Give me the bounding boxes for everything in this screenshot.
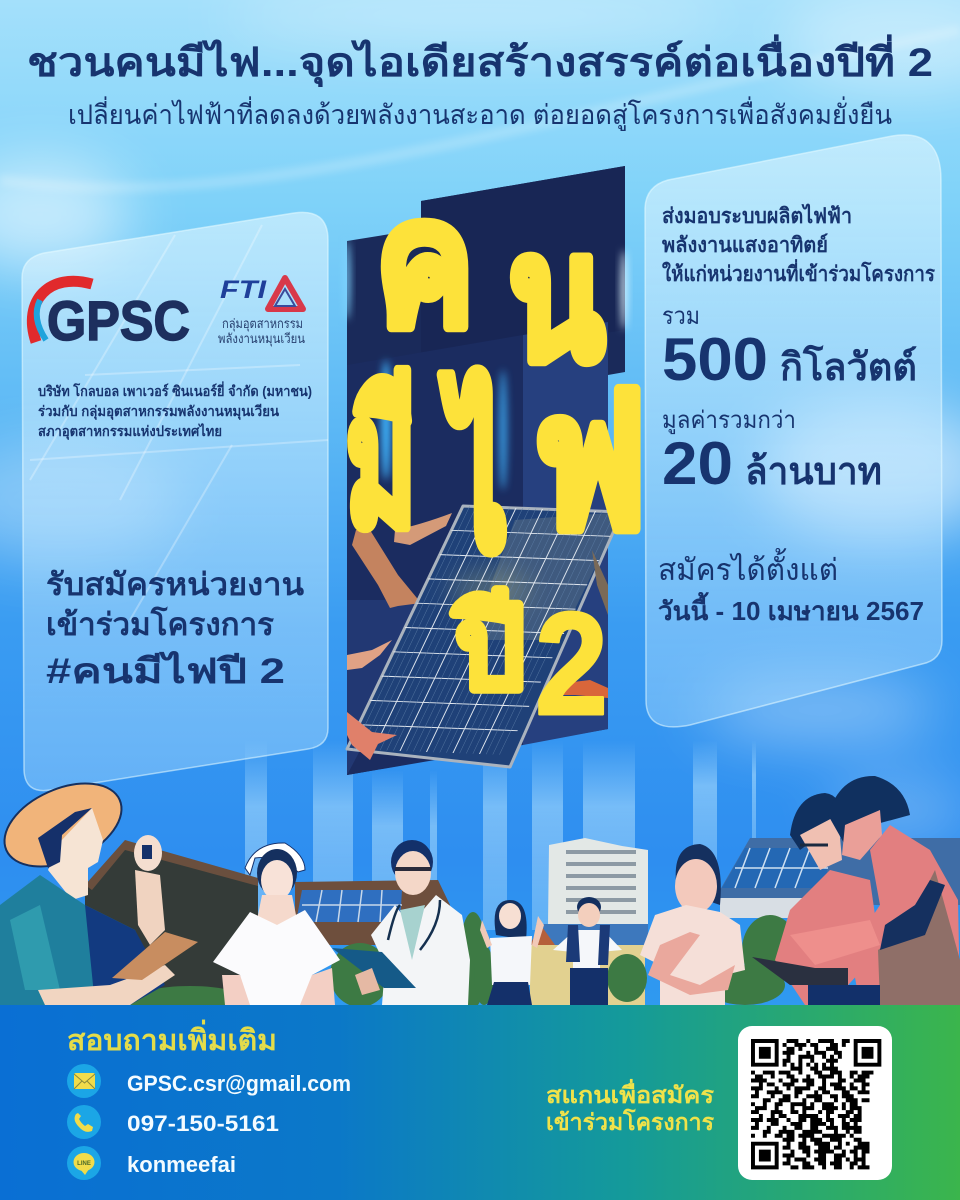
logo: GPSC: GPSC [47,289,190,352]
hospital tower [548,838,648,925]
dark central panels [344,166,627,775]
contact: email [67,1064,351,1098]
headline: คนมีไฟ ปี 2: 2 [535,582,608,745]
text: application dates [658,548,924,626]
text: organisers [38,381,312,440]
title: ชวนคนมีไฟ...จุดไอเดียสร้างสรรค์ต่อเนื่องปีที่ 2 [27,34,933,88]
panel: left glass card [22,212,328,791]
stat: 500 kilowatts [662,303,917,393]
text: right card description: พลังงานแสงอาทิตย์ [662,233,828,257]
contact: phone [67,1105,279,1139]
stat: 20 million baht: 20 [662,430,733,497]
logo: FTI: กลุ่มอุตสาหกรรม [222,316,303,332]
hands [394,513,452,545]
back student [790,793,836,850]
panel frame [347,506,622,767]
icon: envelope [74,1073,95,1089]
panel: right glass card [645,135,942,727]
contact: email: GPSC.csr@gmail.com [127,1071,351,1096]
greenery [130,912,786,1005]
headline: คนมีไฟ ปี 2: น [509,201,604,396]
person: nurse [213,843,340,1005]
person: teacher [640,844,745,1005]
headline: คนมีไฟ ปี 2: ปี [451,585,525,713]
clipboard [112,932,198,980]
front student [828,776,910,845]
text: organisers: สภาอุตสาหกรรมแห่งประเทศไทย [38,422,222,440]
logo: FTI [218,276,305,347]
contact: LINE: konmeefai [127,1152,236,1177]
solar panel held by hands [347,506,622,767]
text: organisers: ร่วมกับ กลุ่มอุตสาหกรรมพลังงานหมุนเวียน [38,403,279,420]
text: call for applications: #คนมีไฟปี 2 [46,650,285,691]
subtitle: เปลี่ยนค่าไฟฟ้าที่ลดลงด้วยพลังงานสะอาด ต่อยอดสู่โครงการเพื่อสังคมยั่งยืน [68,96,892,131]
logo: FTI: พลังงานหมุนเวียน [218,331,305,347]
text: organisers: บริษัท โกลบอล เพาเวอร์ ซินเนอร์ยี่ จำกัด (มหาชน) [38,381,312,399]
stat: 20 million baht: มูลค่ารวมกว่า [662,407,796,435]
face [48,808,103,900]
heading: more information: สอบถามเพิ่มเติม [67,1019,277,1057]
text: scan to apply: สแกนเพื่อสมัคร [546,1078,715,1108]
scene: community buildings and greenery [85,838,960,1018]
solar roof building [295,880,450,945]
icon: phone [75,1113,93,1132]
faint solar panel lines [30,225,328,620]
QR code card [738,1026,892,1180]
stat: 20 million baht: ล้านบาท [745,451,882,493]
stat: 500 kilowatts: 500 [662,326,768,393]
contact: LINE [67,1146,236,1180]
yellow house [530,945,645,1005]
text: right card description [662,203,936,286]
text: call for applications [46,567,304,691]
text: scan to apply: เข้าร่วมโครงการ [546,1108,715,1135]
icon: LINE bubble [74,1153,94,1175]
contact: phone: 097-150-5161 [127,1111,279,1136]
hat [4,782,122,868]
footer band [0,1005,960,1200]
person: schoolboy [553,897,622,1005]
solar rooftop right [720,838,960,905]
stat: 500 kilowatts: รวม [662,303,700,330]
headline: คนมีไฟ ปี 2: ฟ [534,360,646,566]
light beams [245,740,756,930]
people: two students with tablet [752,776,960,1005]
headline: คนมีไฟ ปี 2 [346,167,646,745]
shirt [0,875,136,1005]
text: application dates: วันนี้ - 10 เมษายน 2567 [658,591,924,626]
headline: คนมีไฟ ปี 2: ไ [439,369,508,590]
text: call for applications: รับสมัครหน่วยงาน [46,567,304,602]
text: scan to apply [546,1078,715,1135]
tablet [752,957,848,985]
icon: LINE bubble: LINE [77,1161,91,1167]
person: farmer [0,767,198,1005]
stat: 20 million baht [662,407,882,497]
panel grid [347,506,622,755]
text: call for applications: เข้าร่วมโครงการ [46,606,274,642]
barn [85,842,258,1005]
text: right card description: ให้แก่หน่วยงานที่เข้าร่วมโครงการ [662,258,936,286]
stat: 500 kilowatts: กิโลวัตต์ [780,344,917,389]
text: right card description: ส่งมอบระบบผลิตไฟฟ้า [662,203,852,228]
headline: คนมีไฟ ปี 2: มี [346,363,416,562]
person: schoolgirl [480,900,544,1005]
lower arm [38,965,175,1005]
raised arm [135,870,165,945]
hand: upper left arm [352,530,421,608]
person: doctor [332,840,470,1005]
logo: FTI: FTI [220,276,267,304]
headline: คนมีไฟ ปี 2: ค [376,167,474,362]
clipboard [332,948,416,988]
text: application dates: สมัครได้ตั้งแต่ [658,548,838,587]
